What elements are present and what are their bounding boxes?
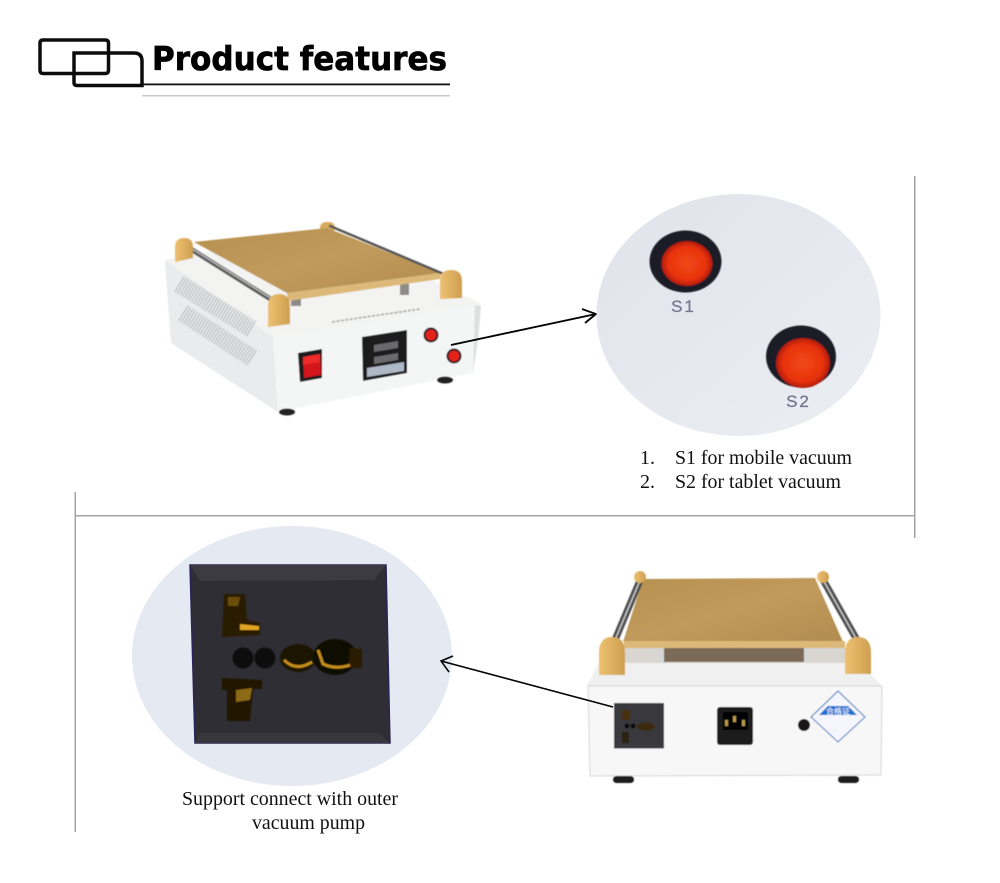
label S1: S1 (671, 297, 696, 316)
steel rods (615, 578, 857, 640)
gold end caps (599, 571, 871, 675)
zoom circle: socket (132, 526, 452, 786)
gold plate (194, 228, 441, 301)
arrow: socket on machine to zoom circle (441, 656, 613, 707)
machine left side with vents (165, 260, 278, 412)
section frame lines (74, 176, 916, 832)
button S2 (766, 326, 836, 388)
temperature controller (362, 330, 407, 381)
shadow gap and supports under plate (625, 648, 847, 663)
text: button legend: S2 for tablet vacuum (675, 471, 841, 493)
diamond certificate label: 合格证 (826, 706, 850, 716)
rear gold post (320, 222, 335, 233)
front buttons (424, 328, 462, 364)
label S2: S2 (786, 392, 811, 411)
support columns (291, 283, 409, 306)
text: button legend: 1. (640, 447, 655, 469)
text: socket caption: Support connect with outer (182, 788, 398, 810)
gold plate (623, 578, 845, 648)
text: button legend: 2. (640, 471, 655, 493)
button S1 (650, 230, 722, 292)
round plug (798, 719, 810, 731)
text: socket caption: vacuum pump (252, 812, 365, 834)
socket holes (222, 594, 362, 721)
photo: machine rear view (587, 571, 882, 783)
feet (613, 776, 859, 783)
socket faceplate (190, 565, 390, 743)
power inlet (717, 707, 753, 745)
machine top surface (587, 662, 882, 686)
feet (279, 376, 453, 416)
title underline (142, 84, 450, 96)
zoom circle: buttons (596, 194, 880, 436)
rear body (588, 686, 882, 776)
panel printed text line (332, 309, 420, 322)
photo: machine front view (165, 222, 481, 416)
gold end caps (175, 238, 462, 327)
text: button legend: S1 for mobile vacuum (675, 447, 852, 469)
small socket (614, 703, 664, 748)
icon: overlapping rounded rectangles (40, 40, 142, 86)
power switch (298, 349, 322, 382)
arrow: machine buttons to zoom circle (451, 309, 596, 345)
text: socket caption (182, 788, 398, 834)
machine body top (165, 232, 480, 337)
steel rods (186, 226, 446, 300)
title: Product features (152, 39, 447, 78)
machine front panel (273, 303, 480, 412)
diamond certificate label (811, 691, 865, 742)
text: button legend (640, 447, 852, 493)
